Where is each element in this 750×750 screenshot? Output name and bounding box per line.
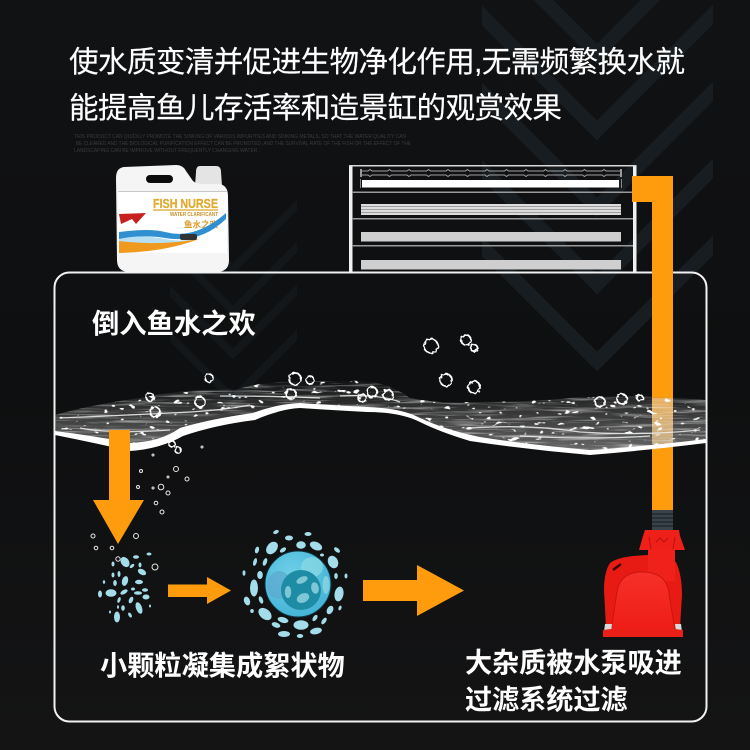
bottle handle — [146, 175, 173, 183]
english subtitle: BE CLEARED AND THE BIOLOGICAL PURIFICATION EFFECT CAN BE PROMOTED, AND THE SURVIVAL RATE OF THE FISH OR THE EFFECT OF THE — [76, 141, 411, 147]
filter tray unit — [349, 165, 636, 272]
bottle label — [118, 192, 227, 253]
icon: product bottle — [116, 165, 229, 272]
pump hose — [652, 510, 673, 531]
english subtitle: THIS PRODUCT CAN QUICKLY PROMOTE THE SINKING OF VARIOUS IMPURITIES AND SINKING METALS, SO THAT THE WATER QUALITY CAN — [74, 134, 406, 140]
background chevrons left — [170, 201, 297, 395]
icon: floc cell — [242, 529, 348, 638]
english subtitle: LANDSCAPING CAN BE IMPROVE WITHOUT FREQUENTLY CHANGING WATER . — [74, 148, 260, 154]
arrow: small right — [168, 577, 231, 604]
falling droplets — [91, 446, 203, 570]
water streaks — [55, 381, 706, 453]
water highlight on pipe — [652, 398, 673, 444]
bottle label: 鱼水之欢 — [184, 220, 219, 230]
bottle body — [116, 165, 229, 272]
bottle label: FISH NURSE — [153, 196, 218, 211]
main water line — [55, 403, 706, 455]
pump body — [604, 555, 682, 628]
background chevrons right — [467, 0, 727, 362]
bottle label: WATER CLARIFICANT — [170, 212, 218, 218]
pump front — [611, 572, 675, 630]
arrow: large right — [363, 565, 464, 616]
icon: water pump — [603, 510, 685, 637]
arrow: orange return pipe — [632, 176, 673, 510]
title: 能提高鱼儿存活率和造景缸的观赏效果 — [69, 92, 562, 125]
water surface splash — [55, 335, 706, 455]
water droplets — [146, 335, 643, 453]
panel: aquarium outline — [54, 272, 706, 722]
cell body — [265, 551, 331, 617]
title: 使水质变清并促进生物净化作用,无需频繁换水就 — [69, 46, 685, 79]
arrow: down — [93, 430, 144, 544]
label: impurities pumped to filter — [465, 647, 682, 715]
water flecks — [55, 381, 706, 453]
label: impurities pumped to filter: 过滤系统过滤 — [465, 684, 628, 715]
pump vent — [613, 564, 621, 570]
bottle cap — [195, 166, 222, 186]
label: pour in product: 倒入鱼水之欢 — [92, 308, 256, 339]
secondary streaks — [60, 396, 700, 438]
icon: small flocculating particles — [98, 552, 152, 622]
pump base — [603, 624, 683, 637]
cell nucleus — [281, 570, 321, 610]
english subtitle — [74, 134, 411, 154]
water haze — [55, 381, 706, 453]
title — [69, 46, 685, 125]
label: impurities pumped to filter: 大杂质被水泵吸进 — [465, 647, 682, 678]
pump collar — [639, 530, 685, 550]
label: small particles flocculate: 小颗粒凝集成絮状物 — [100, 650, 345, 681]
pump neck — [648, 549, 675, 581]
cell fragments — [242, 529, 348, 638]
